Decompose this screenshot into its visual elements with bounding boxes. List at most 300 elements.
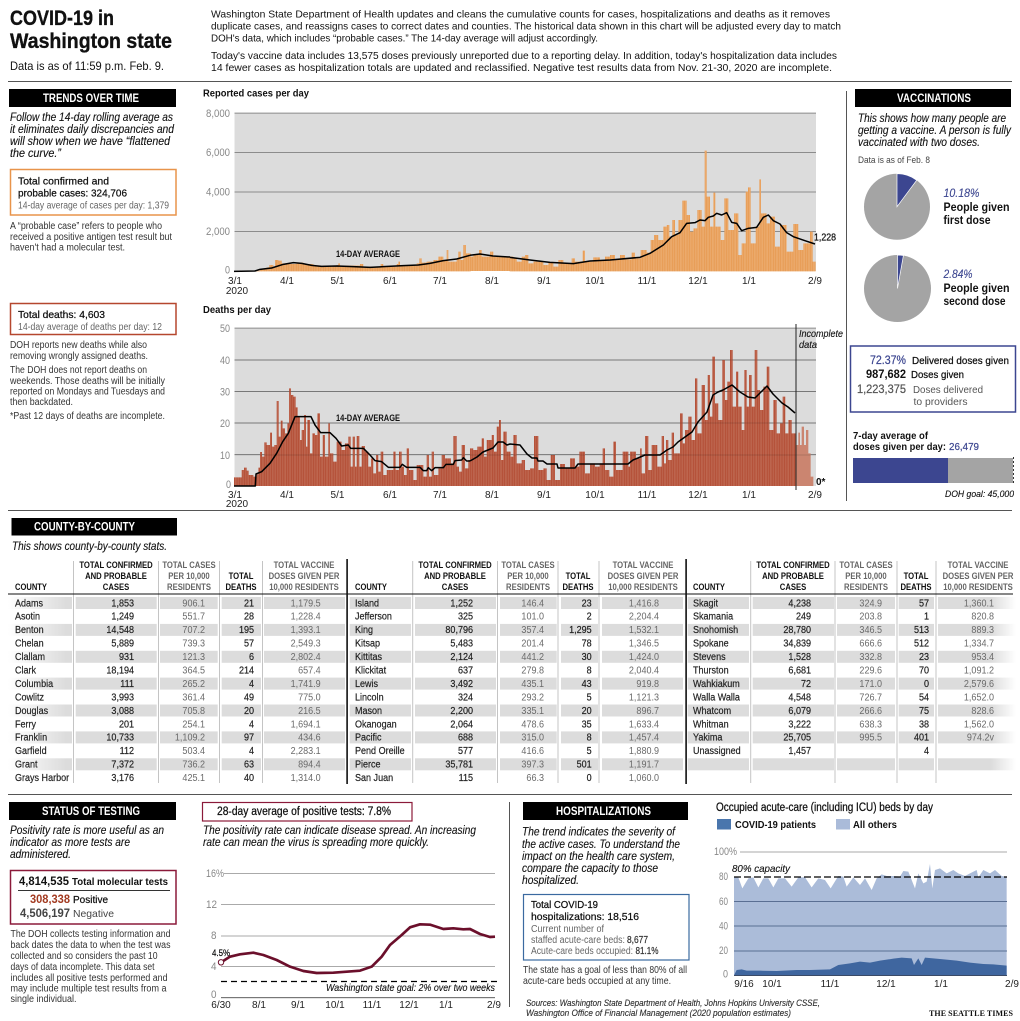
table headers: third block: DEATHS xyxy=(900,581,932,592)
incomplete data bars xyxy=(796,427,813,486)
y axis labels: 40 xyxy=(220,355,230,367)
table data: Island to San Juan: 35,781 xyxy=(445,759,473,771)
table data: Island to San Juan: 78 xyxy=(582,638,592,650)
table data: Skagit to Unassigned: 203.8 xyxy=(859,611,883,623)
callout: hospitalizations total: Acute-care beds occupied: xyxy=(531,946,633,957)
x axis labels: 8/1 xyxy=(485,276,499,287)
table data: Island to San Juan: Pierce xyxy=(355,759,381,771)
label: first dose xyxy=(944,186,1010,227)
y axis labels: 80 xyxy=(719,871,728,883)
table data: Skagit to Unassigned: 2,579.6 xyxy=(964,678,995,690)
line label: 14-day average: 14-DAY AVERAGE xyxy=(336,249,400,260)
table data: Adams to Grays Harbor: 7,372 xyxy=(111,759,134,771)
table data: Adams to Grays Harbor: 2,802.4 xyxy=(291,652,321,663)
chart title: Reported cases per day xyxy=(203,88,309,100)
table data: Skagit to Unassigned: Walla Walla xyxy=(693,692,740,704)
table data: Adams to Grays Harbor: 265.2 xyxy=(182,678,205,690)
data timestamp: Data is as of 11:59 p.m. Feb. 9. xyxy=(10,59,164,73)
table data: Island to San Juan: 35 xyxy=(582,719,592,731)
table data: Island to San Juan: 30 xyxy=(582,652,592,663)
table data: Skagit to Unassigned: 332.8 xyxy=(859,652,883,663)
note: state goal xyxy=(523,964,687,987)
x axis labels: 8/1 xyxy=(485,490,499,501)
table data: Island to San Juan: 115 xyxy=(459,772,474,784)
table headers: second block: RESIDENTS xyxy=(506,581,550,592)
table data: Skagit to Unassigned: 1 xyxy=(924,611,929,623)
table data: Island to San Juan: 43 xyxy=(582,678,592,690)
table data: Adams to Grays Harbor: 254.1 xyxy=(182,719,205,731)
intro note xyxy=(10,112,175,160)
table data: Island to San Juan: San Juan xyxy=(355,772,393,784)
panel: status of testing xyxy=(9,802,501,1011)
note: testing data: collected and so considers the past 10 xyxy=(10,951,158,962)
table headers: first block: 10,000 RESIDENTS xyxy=(269,581,339,592)
pie: first dose xyxy=(864,174,930,240)
table data: Skagit to Unassigned: 6,681 xyxy=(788,665,811,677)
y axis labels: 50 xyxy=(220,323,230,335)
table data: Adams to Grays Harbor: 1,314.0 xyxy=(291,772,321,784)
table data: Skagit to Unassigned: 0 xyxy=(924,678,930,690)
table headers: first block xyxy=(15,559,340,593)
table data: Adams to Grays Harbor: 4 xyxy=(249,746,255,757)
note: probable case: haven't had a molecular test. xyxy=(10,242,125,254)
table data: Adams to Grays Harbor: Garfield xyxy=(15,746,47,757)
table data: Island to San Juan: 2,064 xyxy=(450,719,474,731)
table data: Adams to Grays Harbor: 364.5 xyxy=(182,665,206,677)
table data: Island to San Juan: Lincoln xyxy=(355,692,384,704)
table data: Skagit to Unassigned: Skagit xyxy=(693,598,718,610)
note: testing data xyxy=(10,929,170,1005)
note: testing data: back dates the data to when the test was xyxy=(10,940,170,951)
table data: Adams to Grays Harbor: 906.1 xyxy=(182,598,205,610)
callout: doses: to providers xyxy=(914,396,968,408)
table data: Skagit to Unassigned: 401 xyxy=(914,732,929,744)
table data: Adams to Grays Harbor: 2,549.3 xyxy=(291,638,321,650)
doses per day progress bar: DOH goal: 45,000 xyxy=(945,489,1015,500)
table data: Island to San Juan: 637 xyxy=(458,665,473,677)
chart: deaths per day xyxy=(203,304,843,510)
table headers: second block: DOSES GIVEN PER xyxy=(608,570,679,581)
x axis labels: 4/1 xyxy=(280,276,294,287)
incomplete data marker: Incomplete xyxy=(799,329,843,340)
callout: test totals: Negative xyxy=(73,908,114,920)
table data: Island to San Juan: 2 xyxy=(587,611,592,623)
table data: Skagit to Unassigned: Yakima xyxy=(693,732,723,744)
x axis labels: 6/30 xyxy=(211,1000,231,1011)
callout: doses xyxy=(850,346,1016,412)
table data: Adams to Grays Harbor: Clark xyxy=(15,665,36,677)
panel: trends over time xyxy=(9,89,176,422)
x axis labels: 12/1 xyxy=(688,490,708,501)
table headers: third block: 10,000 RESIDENTS xyxy=(943,581,1013,592)
x axis labels: 11/1 xyxy=(821,979,840,990)
intro note: the curve.” xyxy=(10,148,62,160)
note: deaths reporting: then backdated. xyxy=(10,397,73,408)
data date: Data is as of Feb. 8 xyxy=(858,155,930,166)
table data: Island to San Juan: 919.8 xyxy=(636,678,660,690)
start label: 4.5% xyxy=(212,948,230,959)
x axis labels: 1/1 xyxy=(742,490,756,501)
table headers: first block: TOTAL CASES xyxy=(162,559,216,570)
table data: Island to San Juan: 20 xyxy=(582,705,592,717)
intro note: This shows county-by-county stats. xyxy=(12,541,167,553)
x axis labels xyxy=(226,276,822,297)
table data: Skagit to Unassigned: 1,334.7 xyxy=(964,638,994,650)
table data: Island to San Juan: Pend Oreille xyxy=(355,746,405,757)
table data: Adams to Grays Harbor: 63 xyxy=(244,759,255,771)
label: second dose: People given xyxy=(944,281,1010,295)
chart: occupied beds xyxy=(714,802,1019,990)
table data: Adams to Grays Harbor: 931 xyxy=(119,652,134,663)
faint gridlines over bars xyxy=(234,360,816,455)
intro note: vaccinated with two doses. xyxy=(858,137,980,149)
table data: Skagit to Unassigned: 23 xyxy=(919,652,930,663)
title: COVID-19 in xyxy=(10,7,114,30)
y axis labels: 4 xyxy=(211,961,216,973)
table data: Adams to Grays Harbor: 1,179.5 xyxy=(291,598,321,610)
table data: Adams to Grays Harbor: 894.4 xyxy=(298,759,321,771)
table data: Skagit to Unassigned: 974.2v xyxy=(967,732,994,744)
table data: Skagit to Unassigned: 28,780 xyxy=(783,625,812,636)
intro text block: 14 fewer cases as hospitalization totals are updated and reclassified. Negative test results data from Nov. 21-30, 2020 are incomplete. xyxy=(211,62,832,74)
table data: Adams to Grays Harbor xyxy=(15,598,321,784)
callout: total deaths xyxy=(10,304,176,334)
heading: status of testing: STATUS OF TESTING xyxy=(42,806,140,818)
table data: Adams to Grays Harbor: 3,993 xyxy=(111,692,135,704)
x axis labels: 7/1 xyxy=(433,490,447,501)
callout: test totals: Total molecular tests xyxy=(72,876,168,888)
table data: Skagit to Unassigned: Skamania xyxy=(693,611,734,623)
title: Washington state xyxy=(10,30,172,53)
table data: Island to San Juan: 101.0 xyxy=(521,611,545,623)
incomplete data marker xyxy=(796,324,843,490)
table data: Adams to Grays Harbor: 214 xyxy=(239,665,255,677)
callout: 28-day average xyxy=(202,802,412,821)
callout: doses: 987,682 xyxy=(866,369,906,381)
table headers: first block: COUNTY xyxy=(15,582,48,593)
x axis labels: 5/1 xyxy=(331,490,345,501)
table data: Adams to Grays Harbor: 434.6 xyxy=(298,732,321,744)
table data: Island to San Juan: 5 xyxy=(587,746,592,757)
doses per day progress bar: 26,479 xyxy=(949,441,979,453)
callout: test totals: 4,506,197 xyxy=(20,906,70,920)
y axis labels: 4,000 xyxy=(206,186,230,198)
callout: test totals: 308,338 xyxy=(30,892,70,906)
table data: Adams to Grays Harbor: 14,548 xyxy=(106,625,135,636)
callout: doses: 72.37% xyxy=(870,355,906,367)
table data: Island to San Juan: 324 xyxy=(458,692,474,704)
x axis labels: 10/1 xyxy=(585,490,605,501)
intro note: the active cases. To understand the xyxy=(522,839,680,851)
table data: Island to San Juan: Klickitat xyxy=(355,665,386,677)
table data: Skagit to Unassigned: 171.0 xyxy=(859,678,883,690)
table data: Island to San Juan: 397.3 xyxy=(521,759,545,771)
y axis labels xyxy=(714,846,737,980)
table data: Adams to Grays Harbor: Asotin xyxy=(15,611,40,623)
table data: Skagit to Unassigned: 726.7 xyxy=(859,692,882,704)
table data: Adams to Grays Harbor: 121.3 xyxy=(182,652,206,663)
legend xyxy=(717,819,897,831)
callout: doses: Doses delivered xyxy=(913,384,983,396)
table data: Island to San Juan: Lewis xyxy=(355,678,378,690)
callout: hospitalizations total: Current number of xyxy=(531,924,604,935)
area: COVID-19 patients xyxy=(734,958,1007,975)
sources: Washington Office of Financial Management (2020 population estimates) xyxy=(526,1008,791,1019)
table data: Island to San Juan: 1,633.4 xyxy=(629,719,660,731)
positivity note: rate can mean the virus is spreading more quickly. xyxy=(203,837,429,849)
label: first dose: 10.18% xyxy=(944,186,980,200)
x axis labels: 12/1 xyxy=(688,276,708,287)
sources: Sources: Washington State Department of Health, Johns Hopkins University CSSE, xyxy=(526,998,820,1009)
table data: Skagit to Unassigned xyxy=(693,598,995,757)
table data: Adams to Grays Harbor: 111 xyxy=(120,678,134,690)
table data: Adams to Grays Harbor: 112 xyxy=(120,746,134,757)
intro text block: duplicate cases, and reassigns cases to correct dates and counties. The historical data shown in this chart will be adjusted every day to match xyxy=(211,20,841,32)
table data: Skagit to Unassigned: 889.3 xyxy=(971,625,995,636)
table data: Island to San Juan: 201.4 xyxy=(521,638,545,650)
table data: Island to San Juan: Mason xyxy=(355,705,382,717)
table data: Skagit to Unassigned: 229.6 xyxy=(859,665,883,677)
14-day average line: deaths xyxy=(234,385,795,486)
table data: Adams to Grays Harbor: Douglas xyxy=(15,705,48,717)
table data: Skagit to Unassigned: 6,079 xyxy=(788,705,811,717)
table data: Adams to Grays Harbor: 195 xyxy=(239,625,255,636)
table headers: third block xyxy=(693,559,1014,593)
x axis labels: 6/1 xyxy=(383,490,397,501)
x axis labels: 5/1 xyxy=(331,276,345,287)
table data: Island to San Juan: Island xyxy=(355,598,379,610)
table data: Skagit to Unassigned: Snohomish xyxy=(693,625,738,636)
table data: Skagit to Unassigned: 75 xyxy=(919,705,930,717)
table data: Adams to Grays Harbor: Grant xyxy=(15,759,38,771)
note: deaths reporting: reported on Mondays and Tuesdays and xyxy=(10,386,165,398)
callout: total cases xyxy=(10,170,176,215)
table data: Skagit to Unassigned: 513 xyxy=(914,625,930,636)
table data: Adams to Grays Harbor: 1,694.1 xyxy=(291,719,321,731)
x axis labels: 2020 xyxy=(226,499,249,510)
table data: Skagit to Unassigned: 1,528 xyxy=(788,652,812,663)
table data: Skagit to Unassigned: 1,457 xyxy=(788,746,811,757)
table data: Skagit to Unassigned: Wahkiakum xyxy=(693,678,740,690)
table headers: first block: CASES xyxy=(103,581,129,592)
capacity label: 80% capacity xyxy=(732,863,791,875)
panel: vaccinations xyxy=(850,89,1016,500)
callout: hospitalizations total: 81.1% xyxy=(636,946,659,957)
line label: 14-day average: 14-DAY AVERAGE xyxy=(336,413,400,424)
table data: Island to San Juan: 1,424.0 xyxy=(629,652,660,663)
table data: Island to San Juan: 5 xyxy=(587,692,592,704)
y axis labels: 8,000 xyxy=(206,108,230,120)
intro note: it eliminates daily discrepancies and xyxy=(10,124,175,136)
callout: test totals: Positive xyxy=(73,894,108,906)
table data: Adams to Grays Harbor: 657.4 xyxy=(298,665,321,677)
intro text block xyxy=(211,8,841,74)
heading: trends over time xyxy=(9,89,176,107)
callout: 28-day average: 28-day average of positive tests: 7.8% xyxy=(217,806,391,818)
x axis labels: 9/1 xyxy=(537,490,551,501)
table data: Island to San Juan: 279.8 xyxy=(521,665,545,677)
table data: Adams to Grays Harbor: 1,228.4 xyxy=(291,611,321,623)
label: first dose: People given xyxy=(944,200,1010,214)
intro text block: Today's vaccine data includes 13,575 doses previously unreported due to a reporting delay. In addition, today's hospitalization data includes xyxy=(211,50,837,62)
y axis labels: 6,000 xyxy=(206,147,230,159)
x axis labels: 10/1 xyxy=(762,979,782,990)
callout: total cases: 14-day average of cases per day: 1,379 xyxy=(18,200,169,212)
start marker xyxy=(218,960,224,965)
table headers: second block: AND PROBABLE xyxy=(424,570,486,581)
table headers: first block: PER 10,000 xyxy=(168,570,210,581)
y axis labels: 0 xyxy=(225,264,230,276)
y axis labels: 2,000 xyxy=(206,226,230,238)
x axis labels: 3/1 xyxy=(228,276,242,287)
callout: test totals xyxy=(10,870,176,924)
table data: Adams to Grays Harbor: 2,283.1 xyxy=(291,746,321,757)
table data: Skagit to Unassigned: 1,652.0 xyxy=(964,692,995,704)
table data: Adams to Grays Harbor: 1,109.2 xyxy=(175,732,205,744)
callout: hospitalizations total: Total COVID-19 xyxy=(531,899,598,911)
heading: trends over time: TRENDS OVER TIME xyxy=(43,93,139,105)
note: testing data: single individual. xyxy=(10,994,76,1005)
daily death bars xyxy=(234,350,813,486)
heading: hospitalizations: HOSPITALIZATIONS xyxy=(556,806,651,818)
y axis labels: 0 xyxy=(723,968,728,980)
intro note: impact on the health care system, xyxy=(522,851,675,863)
table data: Island to San Juan: 416.6 xyxy=(521,746,545,757)
table data: Adams to Grays Harbor: Benton xyxy=(15,625,44,636)
x axis labels: 4/1 xyxy=(280,490,294,501)
note: deaths reporting: weekends. Those deaths will be initially xyxy=(9,376,165,387)
table data: Island to San Juan: 23 xyxy=(582,598,592,610)
chart title: Occupied acute-care (including ICU) beds by day xyxy=(716,802,933,814)
table data: Island to San Juan: 435.1 xyxy=(521,678,544,690)
x axis labels: 10/1 xyxy=(585,276,605,287)
y axis labels: 0 xyxy=(211,989,216,1001)
table data: Skagit to Unassigned: Spokane xyxy=(693,638,729,650)
table data: Skagit to Unassigned: 4 xyxy=(924,746,930,757)
table data: Adams to Grays Harbor: Columbia xyxy=(15,678,54,690)
x axis labels xyxy=(211,1000,501,1011)
table data: Skagit to Unassigned: Stevens xyxy=(693,652,726,663)
table data: Island to San Juan: 0 xyxy=(587,772,592,784)
table data: Adams to Grays Harbor: 707.2 xyxy=(182,625,205,636)
table headers: third block: TOTAL CASES xyxy=(839,559,893,570)
table data: Adams to Grays Harbor: 1,249 xyxy=(111,611,134,623)
intro note: indicator as more tests are xyxy=(10,837,130,849)
table data: Island to San Juan: 315.0 xyxy=(521,732,545,744)
table headers: third block: DOSES GIVEN PER xyxy=(943,570,1014,581)
table data: Adams to Grays Harbor: 1,393.1 xyxy=(291,625,321,636)
table data: Adams to Grays Harbor: Adams xyxy=(15,598,43,610)
table data: Skagit to Unassigned: 266.6 xyxy=(859,705,883,717)
table data: Island to San Juan: 2,040.4 xyxy=(629,665,660,677)
table data: Island to San Juan: 501 xyxy=(577,759,592,771)
heading: hospitalizations xyxy=(523,802,688,820)
intro note: Positivity rate is more useful as an xyxy=(10,825,164,837)
table data: Island to San Juan: 66.3 xyxy=(526,772,545,784)
x axis labels: 11/1 xyxy=(638,490,657,501)
callout: doses: Doses given xyxy=(911,369,964,381)
goal label: Washington state goal: 2% over two weeks xyxy=(326,983,495,994)
y axis labels: 20 xyxy=(220,418,230,430)
x axis labels: 2/9 xyxy=(1005,979,1019,990)
14-day average line: cases xyxy=(234,213,815,271)
table data: Adams to Grays Harbor: 28 xyxy=(244,611,255,623)
x axis labels: 12/1 xyxy=(876,979,896,990)
table data: Skagit to Unassigned: 72 xyxy=(801,678,811,690)
intro note xyxy=(858,113,1012,149)
x axis labels: 9/1 xyxy=(537,276,551,287)
table data: Skagit to Unassigned: 249 xyxy=(796,611,811,623)
note: state goal: The state has a goal of less than 80% of all xyxy=(523,964,687,976)
intro text block: Washington State Department of Health updates and cleans the cumulative counts for cases, hospitalizations and deaths as it removes xyxy=(211,8,830,20)
table data: Skagit to Unassigned: 1,091.2 xyxy=(964,665,994,677)
table headers: first block: DOSES GIVEN PER xyxy=(269,570,340,581)
table headers: second block: 10,000 RESIDENTS xyxy=(608,581,678,592)
table headers: second block: TOTAL VACCINE xyxy=(613,559,674,570)
table headers: third block: COUNTY xyxy=(693,582,726,593)
table data: Skagit to Unassigned: 34,839 xyxy=(783,638,811,650)
table data: Adams to Grays Harbor: 1,853 xyxy=(111,598,135,610)
table headers: second block xyxy=(355,559,679,593)
table data: Skagit to Unassigned: 828.6 xyxy=(971,705,995,717)
x axis labels: 12/1 xyxy=(399,1000,419,1011)
table data: Island to San Juan: 8 xyxy=(587,732,592,744)
table data: Island to San Juan: 1,416.8 xyxy=(629,598,660,610)
callout: total deaths: 14-day average of deaths per day: 12 xyxy=(18,322,162,333)
table headers: first block: TOTAL CONFIRMED xyxy=(79,559,153,570)
table data: Skagit to Unassigned: 57 xyxy=(919,598,929,610)
table data: Adams to Grays Harbor: 739.3 xyxy=(182,638,206,650)
pie: second dose xyxy=(864,255,931,322)
positivity note: The positivity rate can indicate disease spread. An increasing xyxy=(203,825,477,837)
x axis labels: 11/1 xyxy=(638,276,657,287)
x axis labels: 2/9 xyxy=(808,490,822,501)
table data: Skagit to Unassigned: 4,238 xyxy=(788,598,812,610)
doses per day progress bar: 7-day average of xyxy=(853,430,928,442)
table headers: second block: COUNTY xyxy=(355,582,388,593)
note: testing data: days of data incomplete. This data set xyxy=(10,962,155,973)
y axis labels: 0 xyxy=(226,479,231,491)
table data: Island to San Juan: 325 xyxy=(458,611,474,623)
callout: doses: Delivered doses given xyxy=(912,355,1009,367)
table data: Adams to Grays Harbor: Chelan xyxy=(15,638,44,650)
table data: Adams to Grays Harbor: 4 xyxy=(249,719,255,731)
note: state goal: acute-care beds occupied at any time. xyxy=(523,975,671,987)
end label: 1,228: 1,228 xyxy=(814,232,836,244)
table headers: first block: RESIDENTS xyxy=(167,581,211,592)
table data: Island to San Juan: 1,295 xyxy=(569,625,592,636)
x axis labels xyxy=(734,979,1019,990)
table data: Island to San Juan: 357.4 xyxy=(521,625,545,636)
y axis labels: 100% xyxy=(714,846,737,858)
callout: doses: 1,223,375 xyxy=(857,384,906,396)
table data: Island to San Juan: 478.6 xyxy=(521,719,545,731)
table data: Island to San Juan: 293.2 xyxy=(521,692,544,704)
table data: Island to San Juan: 2,124 xyxy=(450,652,474,663)
label: second dose: second dose xyxy=(944,294,1006,308)
table data: Skagit to Unassigned: 1,562.0 xyxy=(964,719,995,731)
table data: Adams to Grays Harbor: Cowlitz xyxy=(15,692,44,704)
chart: positivity rate xyxy=(206,868,501,1011)
table data: Adams to Grays Harbor: 20 xyxy=(244,705,255,717)
positivity note xyxy=(203,825,477,849)
table data: Adams to Grays Harbor: 5,889 xyxy=(111,638,134,650)
x axis labels xyxy=(226,490,822,510)
table data: Adams to Grays Harbor: 201 xyxy=(119,719,134,731)
table data: Island to San Juan: Kitsap xyxy=(355,638,381,650)
table data: Island to San Juan: 577 xyxy=(458,746,473,757)
table data: Adams to Grays Harbor: 361.4 xyxy=(182,692,206,704)
